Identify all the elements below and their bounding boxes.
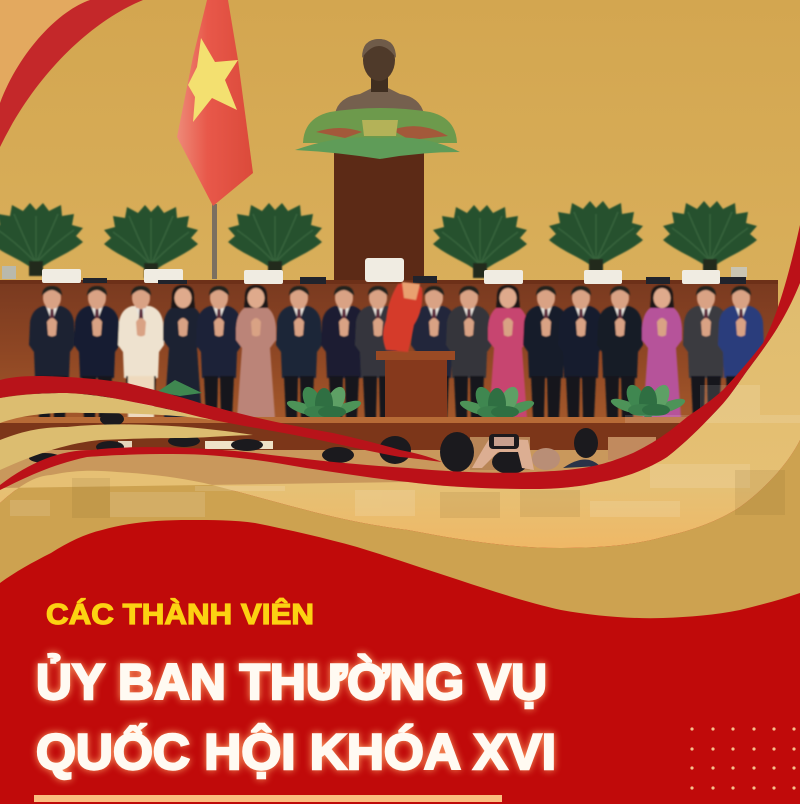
top desk and chairs: [0, 258, 778, 284]
top-left red swoosh: [0, 0, 143, 147]
committee members: [29, 285, 764, 420]
bouquet: [383, 282, 422, 352]
left cream band upper: [0, 393, 213, 423]
top-left corner shape: [0, 0, 90, 103]
bronze bust: [335, 39, 424, 114]
plants: [157, 380, 687, 420]
title: QUỐC HỘI KHÓA XVI: [36, 723, 556, 780]
title: [36, 653, 556, 780]
flower arrangement: [295, 108, 460, 159]
lectern: [376, 351, 455, 418]
front desk: [0, 417, 700, 456]
flag: [177, 0, 253, 279]
photo: National Assembly hall: [0, 0, 800, 490]
dark gold wave: [0, 440, 800, 640]
red bottom panel: [0, 520, 800, 804]
gold wall: [0, 0, 800, 420]
palms: [0, 201, 757, 278]
left cream band lower: [0, 424, 253, 470]
title: ỦY BAN THƯỜNG VỤ: [36, 653, 547, 710]
wood wall: [0, 284, 778, 424]
lower hall and audience: [0, 412, 660, 490]
podium column: [334, 153, 424, 283]
subtitle: CÁC THÀNH VIÊN: [46, 597, 314, 631]
light gold wave: [0, 283, 800, 548]
faded photo overlay: [10, 385, 800, 518]
decorative dot grid: [690, 727, 796, 790]
underline: [34, 795, 502, 802]
main red swoosh: [0, 225, 800, 490]
red swoosh over the photo: [0, 376, 442, 462]
